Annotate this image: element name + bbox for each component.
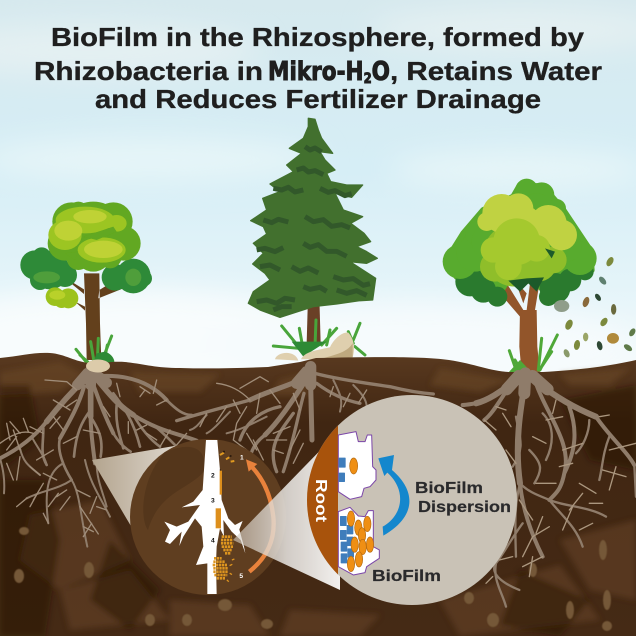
lower biofilm cell bbox=[338, 507, 379, 575]
soil swoosh bbox=[143, 447, 205, 530]
tree: leafy right with falling leaves bbox=[443, 179, 636, 373]
zoom cone: right bbox=[233, 430, 340, 590]
dark green side crowns bbox=[20, 247, 152, 293]
blue dispersion arrow bbox=[378, 455, 409, 536]
label: dispersion: Dispersion bbox=[418, 499, 511, 516]
crown base dark bbox=[455, 263, 594, 307]
trunk bbox=[307, 297, 321, 343]
step numbers: 2 bbox=[211, 472, 215, 479]
roots: left tree bbox=[0, 370, 197, 547]
bacteria attaching bbox=[220, 453, 234, 462]
roots: right tree bbox=[463, 373, 636, 607]
crown light bbox=[480, 223, 567, 287]
step numbers: 1 bbox=[240, 454, 244, 461]
zoom cone: left bbox=[92, 443, 230, 560]
soil pebbles bbox=[14, 527, 612, 631]
white root bbox=[164, 440, 245, 594]
biofilm clusters bbox=[213, 537, 233, 578]
main crown bbox=[48, 202, 141, 272]
zoom circle: biofilm detail bbox=[300, 390, 517, 610]
step numbers: 4 bbox=[211, 538, 215, 545]
soil bbox=[0, 353, 636, 636]
title: Mikro-H bbox=[268, 57, 383, 87]
grass bbox=[509, 335, 557, 372]
title: Rhizobacteria in bbox=[34, 56, 263, 86]
orange cycle arrow bbox=[246, 459, 274, 572]
rock: left tree base bbox=[86, 360, 110, 372]
trunk bbox=[50, 268, 123, 360]
sky background bbox=[0, 0, 636, 390]
label: biofilm: BioFilm bbox=[372, 568, 441, 585]
roots: centre tree bbox=[177, 367, 433, 472]
bacteria monolayer bbox=[220, 471, 222, 495]
step numbers: 5 bbox=[239, 573, 243, 580]
falling leaves bbox=[554, 256, 636, 358]
trunk bbox=[500, 280, 540, 373]
title: BioFilm in the Rhizosphere, formed by bbox=[51, 22, 585, 52]
step numbers: 3 bbox=[211, 497, 215, 504]
title: 2 bbox=[364, 71, 372, 87]
grass bbox=[273, 320, 365, 355]
upper dispersing cell bbox=[338, 432, 376, 499]
step numbers bbox=[211, 454, 244, 580]
zoom circle: root diagram bbox=[130, 439, 286, 595]
title: and Reduces Fertilizer Drainage bbox=[95, 84, 541, 114]
small lime crown bbox=[46, 287, 78, 308]
foliage bbox=[248, 118, 377, 317]
label: dispersion bbox=[415, 480, 511, 516]
crown mid bbox=[443, 179, 597, 279]
pine shading bbox=[257, 147, 370, 310]
title bbox=[34, 22, 602, 114]
tree: pine centre bbox=[248, 118, 377, 361]
title: O bbox=[372, 57, 390, 87]
crown silhouette bbox=[447, 185, 592, 298]
root band bbox=[307, 426, 338, 574]
soil patches bbox=[0, 362, 636, 636]
tree: broadleaf left bbox=[20, 202, 152, 367]
title: , Retains Water bbox=[390, 56, 602, 86]
label: dispersion: BioFilm bbox=[415, 480, 483, 497]
grass bbox=[76, 336, 112, 363]
rocks bbox=[275, 333, 354, 361]
root band: Root bbox=[312, 479, 329, 523]
